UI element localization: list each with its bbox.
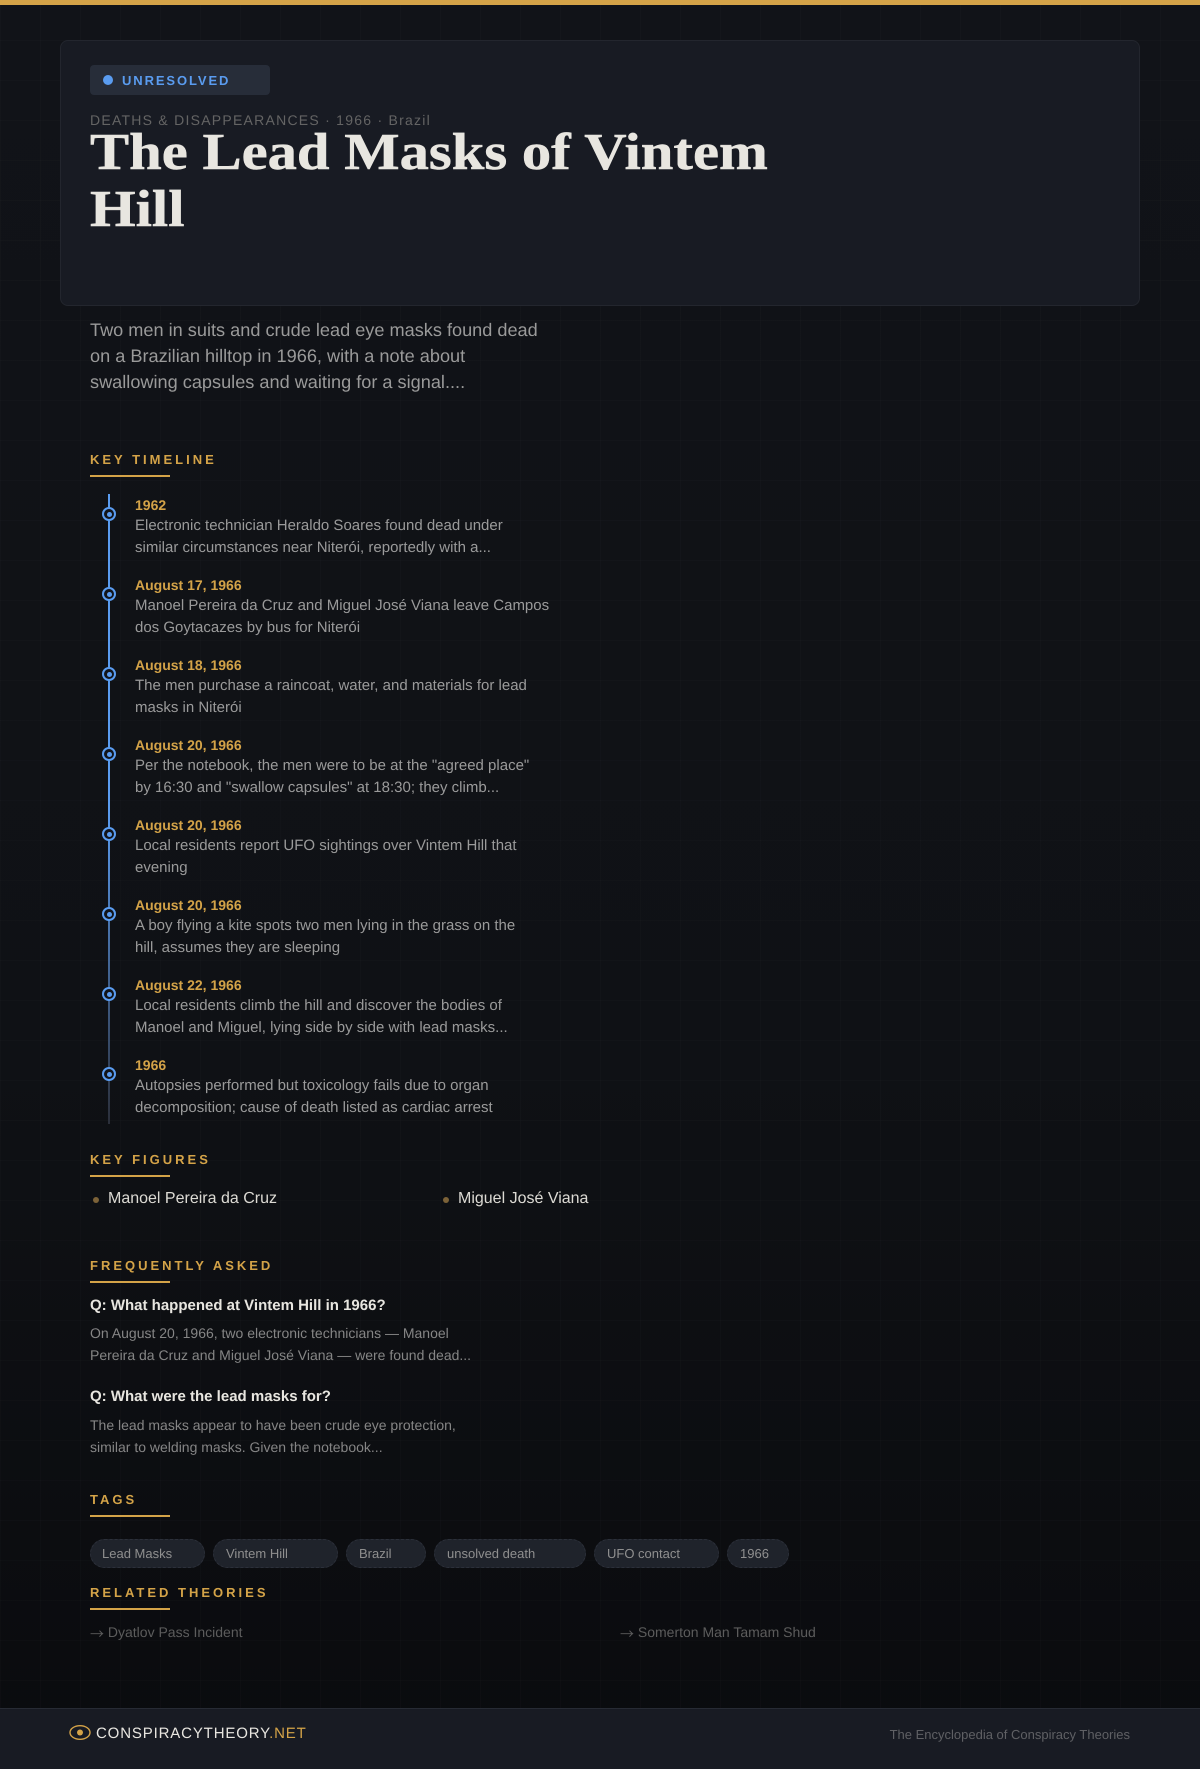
logo wordmark: CONSPIRACYTHEORY.NET <box>96 1725 307 1742</box>
event: August 20 kite: hill, assumes they are sleeping <box>135 939 340 956</box>
status label: UNRESOLVED <box>122 72 230 88</box>
event: 1966 autopsies: Autopsies performed but toxicology fails due to organ <box>135 1077 489 1094</box>
event: August 22: August 22, 1966 <box>135 977 242 993</box>
footer <box>0 1708 1200 1769</box>
event: 1962: 1962 <box>135 497 166 513</box>
question 2: Q: What were the lead masks for? <box>90 1388 331 1405</box>
event: August 18 <box>135 657 527 716</box>
event: 1966 autopsies: decomposition; cause of death listed as cardiac arrest <box>135 1099 493 1116</box>
related link: Dyatlov: → Dyatlov Pass Incident <box>90 1624 243 1644</box>
answer 1: Pereira da Cruz and Miguel José Viana — were found dead... <box>90 1347 471 1363</box>
icon: eye logo <box>69 1725 91 1740</box>
event: August 20 UFO: Local residents report UFO sightings over Vintem Hill that <box>135 837 517 854</box>
event: August 17: August 17, 1966 <box>135 577 242 593</box>
answer 2 <box>90 1417 456 1455</box>
summary: swallowing capsules and waiting for a signal.... <box>90 372 465 392</box>
event: August 22: Local residents climb the hill and discover the bodies of <box>135 997 502 1014</box>
timeline dot 3 <box>102 667 116 681</box>
name: Manoel Pereira da Cruz <box>108 1190 277 1207</box>
tag: Brazil <box>346 1539 426 1568</box>
name: Miguel José Viana <box>458 1190 588 1207</box>
tag: UFO contact <box>594 1539 719 1568</box>
event: August 17: Manoel Pereira da Cruz and Miguel José Viana leave Campos <box>135 597 549 614</box>
timeline dot 6 <box>102 907 116 921</box>
event: 1962: Electronic technician Heraldo Soares found dead under <box>135 517 503 534</box>
event: August 17: dos Goytacazes by bus for Niterói <box>135 619 360 636</box>
tag: Vintem Hill: Vintem Hill <box>226 1546 288 1561</box>
heading: related theories: RELATED THEORIES <box>90 1585 268 1600</box>
title <box>90 124 768 238</box>
tag: unsolved death <box>434 1539 586 1568</box>
event: August 20 notebook: Per the notebook, the men were to be at the "agreed place" <box>135 757 529 774</box>
heading: key timeline: KEY TIMELINE <box>90 452 217 467</box>
event: August 20 UFO: evening <box>135 859 188 876</box>
answer 1: On August 20, 1966, two electronic technicians — Manoel <box>90 1325 449 1341</box>
heading: frequently asked: FREQUENTLY ASKED <box>90 1258 273 1273</box>
heading: tags: TAGS <box>90 1492 137 1507</box>
icon: bullet <box>93 1197 99 1203</box>
event: 1966 autopsies: 1966 <box>135 1057 166 1073</box>
event: August 18: August 18, 1966 <box>135 657 242 673</box>
timeline dot 8 <box>102 1067 116 1081</box>
answer 1 <box>90 1325 471 1363</box>
event: 1962: similar circumstances near Niterói, reportedly with a... <box>135 539 491 556</box>
status badge <box>90 65 270 95</box>
panel: header card <box>60 40 1140 306</box>
summary: Two men in suits and crude lead eye masks found dead <box>90 320 538 340</box>
related link: Somerton: → Somerton Man Tamam Shud <box>620 1624 816 1644</box>
tag: Vintem Hill <box>213 1539 338 1568</box>
title: The Lead Masks of Vintem <box>90 124 768 180</box>
answer 2: similar to welding masks. Given the notebook... <box>90 1439 383 1455</box>
event: August 20 notebook <box>135 737 529 796</box>
icon: bullet <box>443 1197 449 1203</box>
event: August 20 UFO <box>135 817 517 876</box>
summary <box>90 320 538 392</box>
timeline spine <box>108 494 110 1124</box>
title: Hill <box>90 181 185 238</box>
event: August 20 notebook: by 16:30 and "swallow capsules" at 18:30; they climb... <box>135 779 499 796</box>
tag: Lead Masks: Lead Masks <box>102 1546 172 1561</box>
event: August 20 UFO: August 20, 1966 <box>135 817 242 833</box>
timeline dot 4 <box>102 747 116 761</box>
event: 1962 <box>135 497 503 556</box>
heading: key figures: KEY FIGURES <box>90 1152 211 1167</box>
event: August 20 kite: A boy flying a kite spots two men lying in the grass on the <box>135 917 515 934</box>
tag: 1966: 1966 <box>740 1546 769 1561</box>
figure: Manoel <box>93 1190 277 1207</box>
category meta line: DEATHS & DISAPPEARANCES · 1966 · Brazil <box>90 112 431 128</box>
event: August 20 kite: August 20, 1966 <box>135 897 242 913</box>
timeline dot 7 <box>102 987 116 1001</box>
event: August 20 notebook: August 20, 1966 <box>135 737 242 753</box>
event: August 22 <box>135 977 508 1036</box>
question 1: Q: What happened at Vintem Hill in 1966? <box>90 1296 386 1314</box>
figure: Miguel <box>443 1190 588 1207</box>
timeline <box>108 494 110 1124</box>
event: August 18: The men purchase a raincoat, water, and materials for lead <box>135 677 527 694</box>
event: August 22: Manoel and Miguel, lying side by side with lead masks... <box>135 1019 508 1036</box>
event: August 17 <box>135 577 549 636</box>
tag: 1966 <box>727 1539 789 1568</box>
icon: status dot <box>103 75 113 85</box>
event: August 20 kite <box>135 897 515 956</box>
footer tagline: The Encyclopedia of Conspiracy Theories <box>890 1727 1130 1742</box>
timeline dot 5 <box>102 827 116 841</box>
timeline dot 2 <box>102 587 116 601</box>
tag: UFO contact: UFO contact <box>607 1546 680 1561</box>
timeline dot 1 <box>102 507 116 521</box>
tag: Brazil: Brazil <box>359 1546 392 1561</box>
top accent bar <box>0 0 1200 5</box>
event: August 18: masks in Niterói <box>135 699 242 716</box>
tag: Lead Masks <box>90 1539 205 1568</box>
answer 2: The lead masks appear to have been crude eye protection, <box>90 1417 456 1433</box>
event: 1966 autopsies <box>135 1057 493 1116</box>
summary: on a Brazilian hilltop in 1966, with a note about <box>90 346 465 366</box>
tag: unsolved death: unsolved death <box>447 1546 535 1561</box>
